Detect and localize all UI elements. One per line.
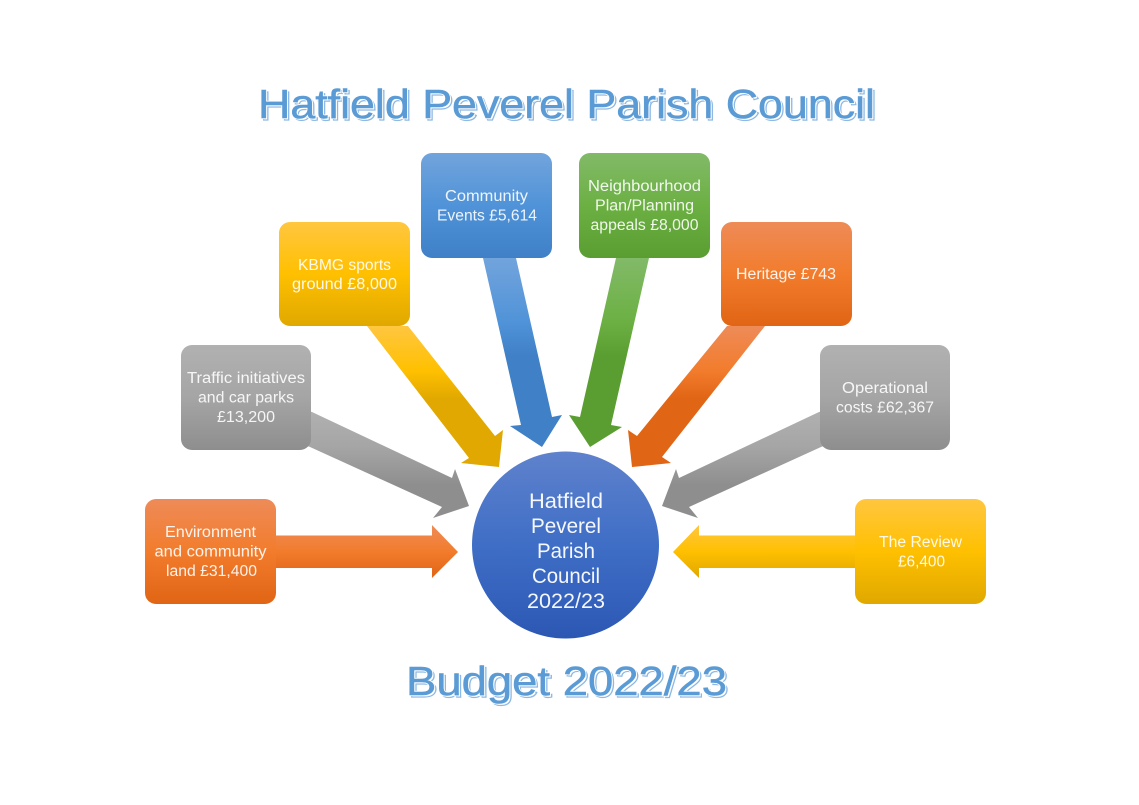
box: traffic initiatives and car parks: Traffic initiatives — [187, 370, 305, 387]
subtitle: budget: Budget 2022/23 — [408, 660, 729, 706]
arrow: community events to centre — [483, 258, 562, 447]
box: heritage — [721, 222, 852, 326]
box: operational costs — [820, 345, 950, 450]
box: neighbourhood plan: appeals £8,000 — [590, 217, 699, 234]
box: operational costs: Operational — [842, 380, 928, 397]
box: the review: £6,400 — [898, 554, 945, 570]
centre circle: Parish — [537, 540, 595, 563]
arrow: operational costs to centre — [662, 410, 826, 518]
subtitle: budget: Budget 2022/23 — [406, 658, 727, 704]
box: traffic initiatives and car parks: and car parks — [198, 390, 294, 406]
centre circle: Peverel — [531, 515, 601, 538]
box: the review: The Review — [879, 534, 963, 551]
subtitle: budget: Budget 2022/23 — [406, 658, 727, 704]
arrow: neighbourhood to centre — [569, 258, 649, 447]
box: KBMG sports ground: KBMG sports — [298, 257, 391, 274]
box: traffic initiatives and car parks: £13,200 — [217, 409, 275, 426]
box: the review — [855, 499, 986, 604]
arrow: heritage to centre — [628, 326, 765, 467]
box: neighbourhood plan — [579, 153, 710, 258]
centre circle — [472, 452, 659, 638]
box: environment and community land — [145, 499, 276, 604]
box: environment and community land: land £31,400 — [166, 563, 257, 580]
box: environment and community land: and community — [154, 544, 267, 560]
box: KBMG sports ground — [279, 222, 410, 326]
centre circle: 2022/23 — [527, 590, 605, 613]
title: Hatfield Peverel Parish Council — [260, 83, 877, 129]
title: Hatfield Peverel Parish Council — [258, 81, 875, 127]
arrow: the review to centre — [673, 525, 861, 578]
title: Hatfield Peverel Parish Council — [258, 81, 875, 127]
box: community events: Events £5,614 — [437, 208, 537, 224]
box: community events — [421, 153, 552, 258]
arrow: KBMG to centre — [367, 326, 503, 467]
arrow: traffic to centre — [305, 410, 469, 518]
box: environment and community land: Environment — [165, 524, 257, 541]
box: neighbourhood plan: Plan/Planning — [595, 198, 694, 214]
centre circle: Council — [532, 565, 600, 588]
box: heritage: Heritage £743 — [736, 266, 836, 283]
box: operational costs: costs £62,367 — [836, 400, 934, 416]
box: community events: Community — [445, 188, 528, 205]
centre circle: Hatfield — [529, 490, 603, 513]
box: traffic initiatives and car parks — [181, 345, 311, 450]
box: neighbourhood plan: Neighbourhood — [588, 178, 701, 195]
arrow: environment to centre — [270, 525, 458, 578]
box: KBMG sports ground: ground £8,000 — [292, 276, 397, 293]
